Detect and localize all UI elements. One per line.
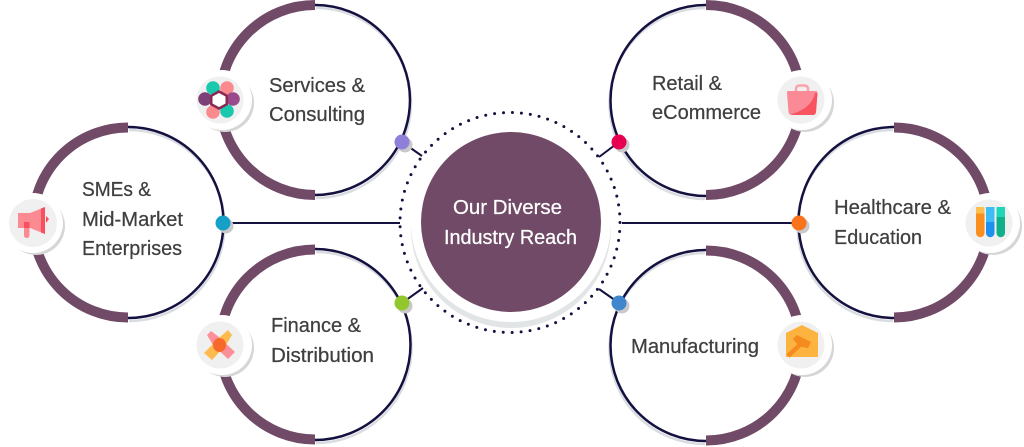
node dot: smes [216, 216, 234, 234]
node dot: services [394, 134, 412, 152]
hub title [444, 197, 577, 249]
panel: Manufacturing [610, 250, 834, 444]
label: healthcare: Education [834, 227, 922, 249]
icon: shopping bag [772, 70, 834, 132]
node dot: finance [394, 296, 412, 314]
label: healthcare: Healthcare & [834, 197, 952, 219]
node dot: manufacturing [612, 296, 630, 314]
label: healthcare [834, 197, 952, 249]
icon: hammer in house [772, 315, 834, 377]
panel: Finance & Distribution [192, 249, 412, 443]
icon: flower [192, 70, 254, 132]
icon: megaphone [3, 193, 65, 255]
panel: Services & Consulting [192, 5, 412, 198]
panel: Healthcare & Education [792, 127, 1022, 321]
label: smes: SMEs & [82, 179, 152, 201]
label: finance: Finance & [271, 315, 362, 337]
dotted ring around hub [400, 112, 620, 332]
node dot: retail [612, 134, 630, 152]
label: finance: Distribution [271, 345, 374, 367]
label: smes: Enterprises [82, 238, 182, 260]
hub title: Industry Reach [444, 227, 577, 249]
label: services: Consulting [269, 104, 365, 126]
label: services: Services & [269, 75, 366, 97]
label: retail: Retail & [652, 73, 723, 95]
label: finance [271, 315, 374, 367]
label: retail [652, 73, 761, 124]
icon: crossed bottles [192, 315, 254, 377]
hub title: Our Diverse [453, 197, 562, 219]
panel: Retail & eCommerce [610, 5, 834, 199]
label: smes [82, 179, 183, 260]
icon: test tubes [960, 193, 1022, 255]
label: manufacturing: Manufacturing [631, 336, 759, 358]
label: smes: Mid-Market [82, 209, 183, 231]
central hub [411, 122, 611, 328]
label: services [269, 75, 366, 126]
label: retail: eCommerce [652, 102, 761, 124]
connector lines [223, 142, 799, 303]
node dot: healthcare [792, 216, 810, 234]
panel: SMEs & Mid-Market Enterprises [3, 127, 234, 321]
